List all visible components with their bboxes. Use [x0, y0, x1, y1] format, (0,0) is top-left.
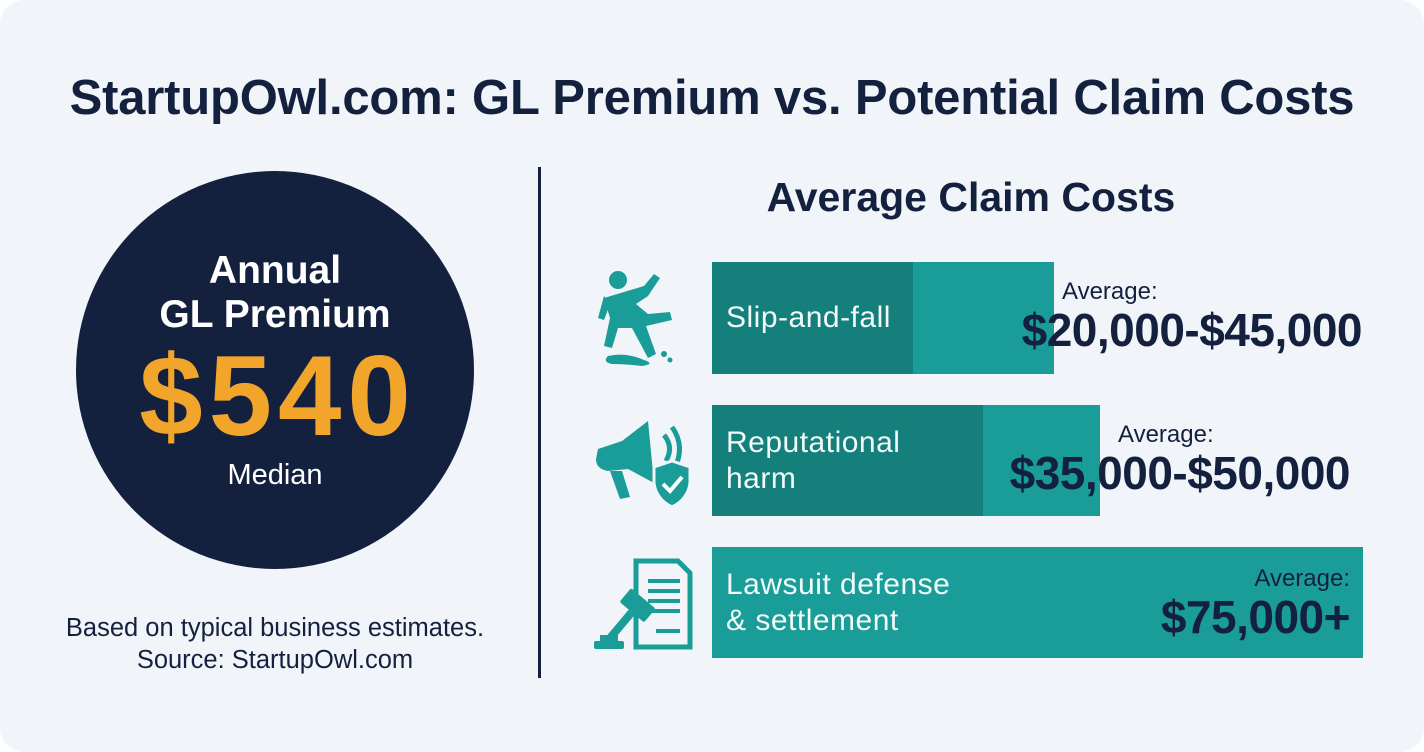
bar: reputational harm [712, 405, 1100, 516]
value: $35,000-$50,000 [1010, 447, 1350, 499]
section heading: Average Claim Costs [767, 174, 1175, 220]
source note [66, 614, 484, 674]
circle heading [159, 249, 391, 336]
value: $20,000-$45,000 [1022, 304, 1362, 356]
row: slip-and-fall [598, 262, 1362, 374]
bar label [726, 426, 900, 495]
value: Average: [1254, 565, 1350, 592]
source note: Source: StartupOwl.com [137, 646, 413, 674]
icon: megaphone with shield [596, 421, 689, 506]
value: $75,000+ [1161, 591, 1350, 643]
bar label [726, 568, 950, 637]
icon: falling person [598, 271, 672, 366]
premium amount: $540 [139, 333, 417, 460]
source note: Based on typical business estimates. [66, 614, 484, 642]
value: Average: [1118, 421, 1214, 448]
bar label: harm [726, 462, 796, 495]
circle heading: Annual [209, 249, 341, 292]
value [1161, 565, 1350, 643]
bar label: & settlement [726, 604, 899, 637]
icon: gavel and document [594, 558, 692, 650]
value [1022, 278, 1362, 356]
circle heading: GL Premium [159, 293, 391, 336]
bar: lawsuit [712, 547, 1363, 658]
bar label: Reputational [726, 426, 900, 459]
row: lawsuit [594, 547, 1363, 658]
value [1010, 421, 1350, 499]
premium circle [76, 171, 474, 569]
bar label: Lawsuit defense [726, 568, 950, 601]
bar: slip-and-fall [712, 262, 1054, 374]
row: reputational harm [596, 405, 1350, 516]
bar label: Slip-and-fall [726, 301, 891, 334]
title: StartupOwl.com: GL Premium vs. Potential Claim Costs [70, 71, 1354, 125]
value: Average: [1062, 278, 1158, 305]
median label: Median [227, 459, 323, 491]
